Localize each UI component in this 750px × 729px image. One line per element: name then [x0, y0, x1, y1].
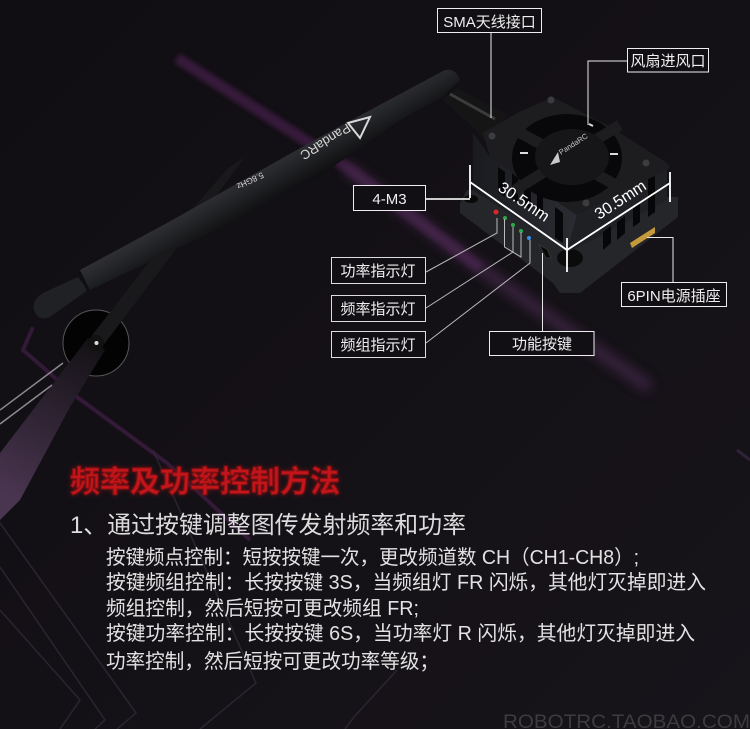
- label: SMA antenna port: [438, 8, 542, 32]
- bottom prop blade: [0, 338, 105, 520]
- label: frequency indicator: [332, 296, 426, 322]
- dimension text left: 30.5mm: [495, 179, 552, 226]
- corner screws: [488, 96, 650, 206]
- label: function button: [490, 332, 594, 356]
- dimension text right: 30.5mm: [592, 178, 650, 223]
- section title: 频率及功率控制方法: [70, 466, 340, 499]
- label: frequency indicator: 频率指示灯: [340, 301, 416, 318]
- function button: [539, 245, 551, 258]
- antenna: [34, 70, 507, 318]
- instruction text: 按键频组控制：长按按键 3S，当频组灯 FR 闪烁，其他灯灭掉即进入: [106, 571, 706, 594]
- fan vent highlights: [520, 124, 618, 154]
- 6pin power socket: [630, 227, 655, 248]
- antenna tip: [34, 277, 88, 318]
- top prop blade: [90, 157, 245, 347]
- mounting holes: [464, 195, 478, 203]
- instruction text: 按键频点控制：短按按键一次，更改频道数 CH（CH1-CH8）;: [106, 546, 639, 569]
- LED indicators: [494, 210, 498, 214]
- VTX device: [460, 96, 678, 293]
- leader lines: [426, 33, 673, 343]
- label: fan air intake: [628, 48, 708, 72]
- fan spokes: [515, 125, 625, 190]
- label: 6PIN power socket: 6PIN电源插座: [627, 288, 721, 305]
- label: band indicator: [332, 332, 426, 358]
- label: band indicator: 频组指示灯: [340, 337, 416, 354]
- antenna connector arm: [443, 88, 507, 143]
- antenna logo: PandaRC: [298, 120, 353, 163]
- hub logo: PandaRC: [557, 131, 590, 157]
- label: 6PIN power socket: [622, 282, 726, 306]
- instruction text: 按键功率控制：长按按键 6S，当功率灯 R 闪烁，其他灯灭掉即进入: [106, 622, 695, 645]
- instruction text: [106, 546, 706, 673]
- instruction text: 频组控制，然后短按可更改频组 FR;: [106, 597, 419, 620]
- label: function button: 功能按键: [512, 336, 572, 353]
- left side wall: [473, 133, 577, 252]
- label: SMA antenna port: SMA天线接口: [443, 14, 536, 31]
- fan ring: [512, 114, 622, 202]
- right side wall: [567, 163, 667, 252]
- label: 4-M3: 4-M3: [372, 191, 407, 208]
- label: power indicator: 功率指示灯: [340, 263, 416, 280]
- heading: step 1: 1、通过按键调整图传发射频率和功率: [70, 512, 466, 539]
- label: 4-M3: [354, 186, 426, 210]
- prop disc: [63, 310, 129, 376]
- dimension lines 30.5mm: [470, 165, 670, 272]
- instruction text: 功率控制，然后短按可更改功率等级；: [106, 650, 439, 673]
- top plate: [483, 97, 670, 215]
- label: power indicator: [332, 258, 426, 284]
- hub logo: [550, 131, 590, 165]
- antenna tube: [80, 70, 460, 290]
- antenna logo: [235, 117, 370, 191]
- prop hub: [88, 335, 104, 351]
- fan hub: [535, 129, 609, 185]
- base plate: [460, 190, 678, 293]
- propeller: [0, 157, 245, 520]
- antenna logo: 5.8GHz: [235, 170, 265, 191]
- label: fan air intake: 风扇进风口: [630, 53, 706, 70]
- side vents: [498, 167, 655, 250]
